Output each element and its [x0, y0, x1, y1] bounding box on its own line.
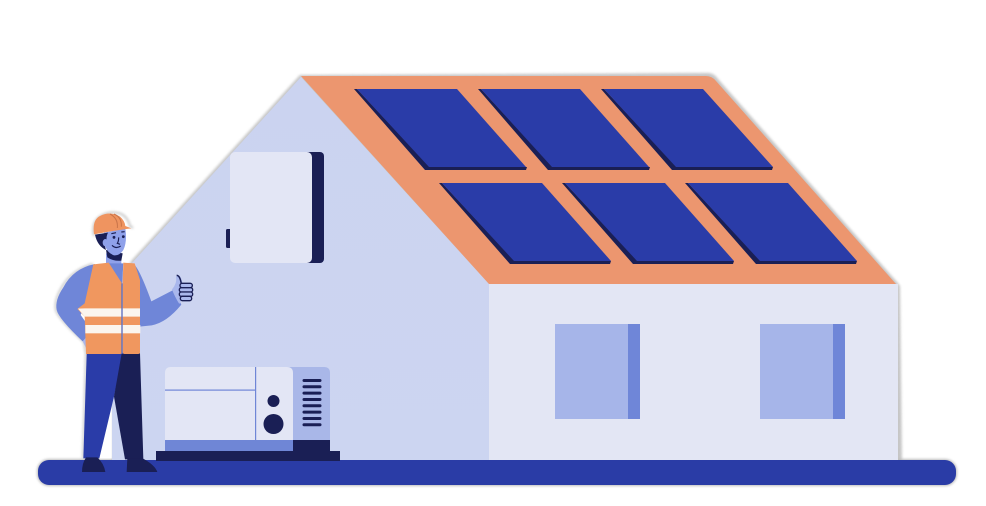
hand on hip: [83, 333, 102, 352]
roof: [301, 76, 896, 284]
panel row 2: [439, 183, 857, 264]
worker: [56, 213, 193, 472]
hard hat: [94, 213, 131, 234]
shirt torso: [107, 263, 123, 287]
hair: [95, 233, 108, 250]
house: [112, 76, 898, 460]
front wall: [489, 284, 898, 460]
right leg: [114, 353, 143, 459]
window right: [760, 324, 845, 419]
beard shadow: [106, 250, 123, 261]
wall battery unit: [226, 152, 324, 263]
vents: [302, 379, 322, 426]
face details: [111, 232, 125, 248]
white gap between legs: [99, 397, 114, 458]
boots: [82, 457, 157, 472]
vest stripes: [78, 308, 140, 333]
solar panels: [354, 89, 857, 264]
panel row 1: [354, 89, 773, 170]
thumbs up hand: [172, 275, 193, 304]
ear: [103, 239, 108, 246]
right arm: [133, 264, 181, 327]
vest: [77, 263, 122, 354]
gable wall: [112, 77, 489, 460]
left leg: [83, 353, 123, 458]
left arm: [56, 264, 95, 341]
neck: [106, 253, 121, 271]
head: [104, 229, 126, 255]
vest zipper: [121, 283, 123, 354]
ground: [38, 460, 956, 485]
soft outline halo: [37, 73, 957, 486]
generator: [156, 367, 340, 461]
window left: [555, 324, 640, 419]
